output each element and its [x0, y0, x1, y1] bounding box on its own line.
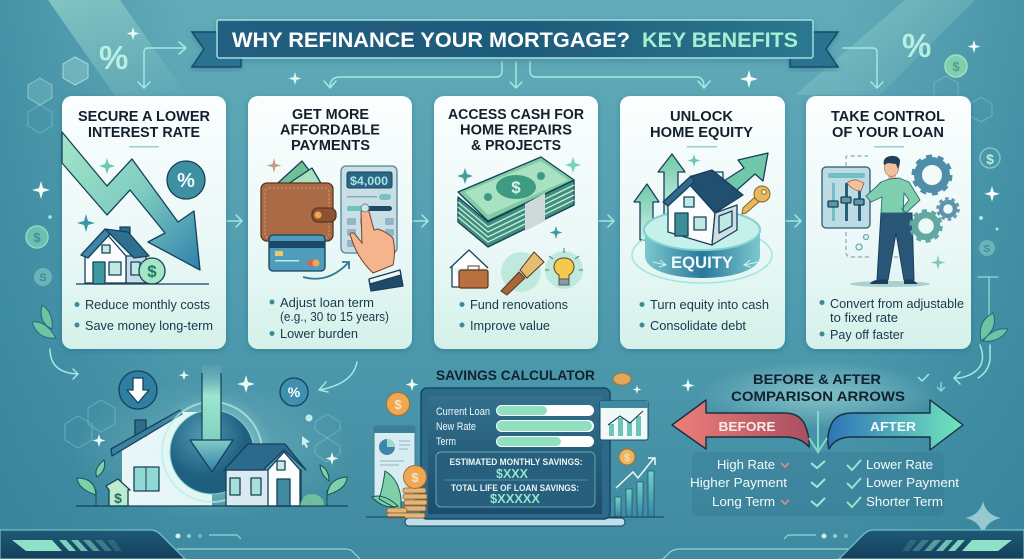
icon: gears	[911, 156, 958, 241]
title text mint: KEY BENEFITS	[642, 28, 798, 52]
bottom right tech corner	[839, 530, 1024, 559]
icon: house with coin: $	[147, 262, 157, 281]
icon: percent badge: %	[177, 170, 195, 192]
icon: dollar house	[106, 479, 130, 506]
icon: dollar house: $	[114, 490, 122, 506]
icon: house with coin	[81, 227, 165, 284]
decorative corner icons right: S	[984, 244, 991, 255]
bottom left tech corner	[0, 530, 185, 559]
icon: down-arrow badge	[119, 371, 157, 409]
heading: card 4	[650, 109, 753, 141]
arrow: after: AFTER	[870, 419, 917, 434]
decorative corner icons right: $	[952, 59, 960, 74]
icon: plant	[372, 471, 401, 512]
bullet list: card 3: Fund renovations	[470, 298, 568, 312]
heading: before and after: BEFORE & AFTER	[753, 371, 881, 387]
heading: card 1	[78, 109, 211, 141]
dashed frame	[846, 156, 905, 257]
icon: coin stack: $	[411, 470, 419, 485]
panel: access cash	[434, 96, 598, 349]
panel: affordable payments	[248, 96, 412, 349]
bullet list: card 1: Save money long-term	[85, 319, 213, 333]
bullet list: card 1	[74, 298, 213, 333]
panel: secure a lower interest rate	[62, 96, 226, 349]
decorative corner icons right: $	[986, 151, 994, 167]
list: before: Long Term	[712, 494, 775, 509]
heading: card 4: HOME EQUITY	[650, 125, 753, 141]
heading: savings calculator: SAVINGS CALCULATOR	[436, 367, 595, 383]
icon: house and toolbox	[450, 250, 488, 288]
icon: stack of cash: $	[511, 178, 521, 197]
results box: $XXXXX	[490, 491, 540, 506]
icon: falling zigzag arrow	[62, 132, 200, 270]
chart window	[600, 401, 648, 440]
connector arrows from title	[138, 42, 883, 88]
input: term: Term	[436, 436, 456, 448]
right house	[224, 444, 306, 506]
icon: equity disc: EQUITY	[671, 253, 734, 272]
bullet list: card 5	[820, 297, 964, 342]
icon: credit card	[269, 235, 325, 271]
glowing circle	[152, 392, 272, 512]
input: current loan	[436, 405, 594, 418]
icon: light bulb	[545, 248, 583, 289]
heading: before and after: COMPARISON ARROWS	[731, 388, 905, 404]
decorative corner icons right: %	[902, 27, 931, 64]
bullet list: card 5: to fixed rate	[830, 311, 898, 325]
icon: coin right: $	[624, 453, 630, 464]
savings calculator	[366, 367, 664, 526]
bullet list: card 2: (e.g., 30 to 15 years)	[280, 310, 389, 324]
icon: coin: $	[394, 397, 402, 412]
curved arrows below cards	[50, 345, 990, 392]
heading: before and after	[731, 371, 905, 404]
arrows between cards	[227, 215, 801, 227]
results box: $XXX	[496, 466, 528, 481]
icon: calculator	[341, 166, 397, 253]
list: after: Lower Payment	[866, 475, 959, 490]
bullet list: card 1: Reduce monthly costs	[85, 298, 210, 312]
decorative corner icons left: $	[33, 230, 41, 245]
heading: card 3: ACCESS CASH FOR	[448, 107, 585, 123]
results box	[436, 452, 595, 507]
decorative corner icons right	[740, 27, 1008, 341]
title banner	[192, 20, 838, 67]
results box: ESTIMATED MONTHLY SAVINGS:	[450, 457, 582, 467]
heading: card 3	[448, 107, 585, 154]
heading: card 5: TAKE CONTROL	[831, 109, 945, 125]
bullet list: card 4: Consolidate debt	[650, 319, 747, 333]
heading: card 5: OF YOUR LOAN	[832, 125, 944, 141]
icon: percent badge	[280, 378, 308, 406]
icon: house	[663, 170, 743, 245]
heading: card 2: GET MORE	[292, 107, 369, 123]
title text white: WHY REFINANCE YOUR MORTGAGE?	[232, 28, 630, 52]
panel: unlock home equity	[620, 96, 785, 349]
list: after: Lower Rate	[866, 457, 933, 472]
list: before: Higher Payment	[690, 475, 787, 490]
heading: card 3: & PROJECTS	[471, 138, 561, 154]
icon: percent badge	[167, 161, 205, 199]
panel: take control	[806, 96, 971, 349]
decorative corner icons left: %	[99, 39, 128, 76]
icon: slider panel	[822, 167, 870, 228]
decorative corner icons left: S	[39, 272, 47, 284]
icon: percent badge: %	[288, 384, 301, 400]
input: term	[436, 436, 594, 448]
input: new rate	[436, 420, 594, 433]
icon: stack of cash	[458, 157, 574, 247]
icon: calculator: $4,000	[350, 174, 388, 188]
input: new rate: New Rate	[436, 421, 476, 433]
sparkle watermark	[965, 501, 1001, 535]
laptop	[405, 388, 625, 526]
bullet list: card 2	[270, 296, 389, 341]
input: current loan: Current Loan	[436, 406, 490, 418]
list: centre checks	[811, 461, 825, 506]
growth chart	[610, 458, 664, 517]
icon: coin stack	[387, 466, 427, 518]
bullet list: card 2: Lower burden	[280, 327, 358, 341]
list: after: Shorter Term	[866, 494, 943, 509]
heading: card 2	[280, 107, 380, 154]
icon: document with pie	[374, 426, 415, 502]
arrow: before	[672, 400, 809, 449]
list: before	[690, 457, 789, 509]
arrow: centre down	[809, 411, 827, 453]
heading: card 2: AFFORDABLE	[280, 122, 380, 138]
illustration: homes with falling-rate arrow	[65, 365, 348, 512]
heading: card 3: HOME REPAIRS	[460, 122, 572, 138]
list: before: High Rate	[717, 457, 775, 472]
bullet list: card 3: Improve value	[470, 319, 550, 333]
before and after comparison	[672, 371, 963, 509]
decorative corner icons left	[26, 27, 302, 338]
left house	[111, 410, 212, 506]
heading: card 1: SECURE A LOWER	[78, 109, 211, 125]
icon: paint brush	[501, 252, 544, 295]
icon: key	[742, 186, 770, 214]
icon: coin	[386, 392, 410, 416]
icon: wallet with cash	[261, 161, 336, 241]
heading: card 1: INTEREST RATE	[88, 125, 200, 141]
bullet list: card 5: Pay off faster	[830, 328, 904, 342]
bottom centre tech lines	[176, 534, 848, 559]
list: after	[847, 457, 959, 509]
bullet list: card 5: Convert from adjustable	[830, 297, 964, 311]
icon: growth arrows	[634, 153, 768, 240]
icon: coin right	[619, 449, 635, 465]
heading: card 5	[831, 109, 945, 141]
large down arrow	[190, 365, 233, 472]
icon: person	[847, 156, 930, 287]
bullet list: card 4: Turn equity into cash	[650, 298, 769, 312]
bullet list: card 2: Adjust loan term	[280, 296, 374, 310]
results box: TOTAL LIFE OF LOAN SAVINGS:	[451, 483, 579, 493]
bullet list: card 4	[640, 298, 769, 333]
plants	[77, 460, 347, 506]
icon: equity disc	[632, 210, 772, 283]
heading: card 2: PAYMENTS	[291, 138, 370, 154]
heading: card 4: UNLOCK	[670, 109, 734, 125]
arrow: after	[828, 400, 963, 450]
icon: pointing hand	[350, 204, 403, 291]
arrow: before: BEFORE	[718, 419, 776, 434]
bullet list: card 3	[460, 298, 568, 333]
